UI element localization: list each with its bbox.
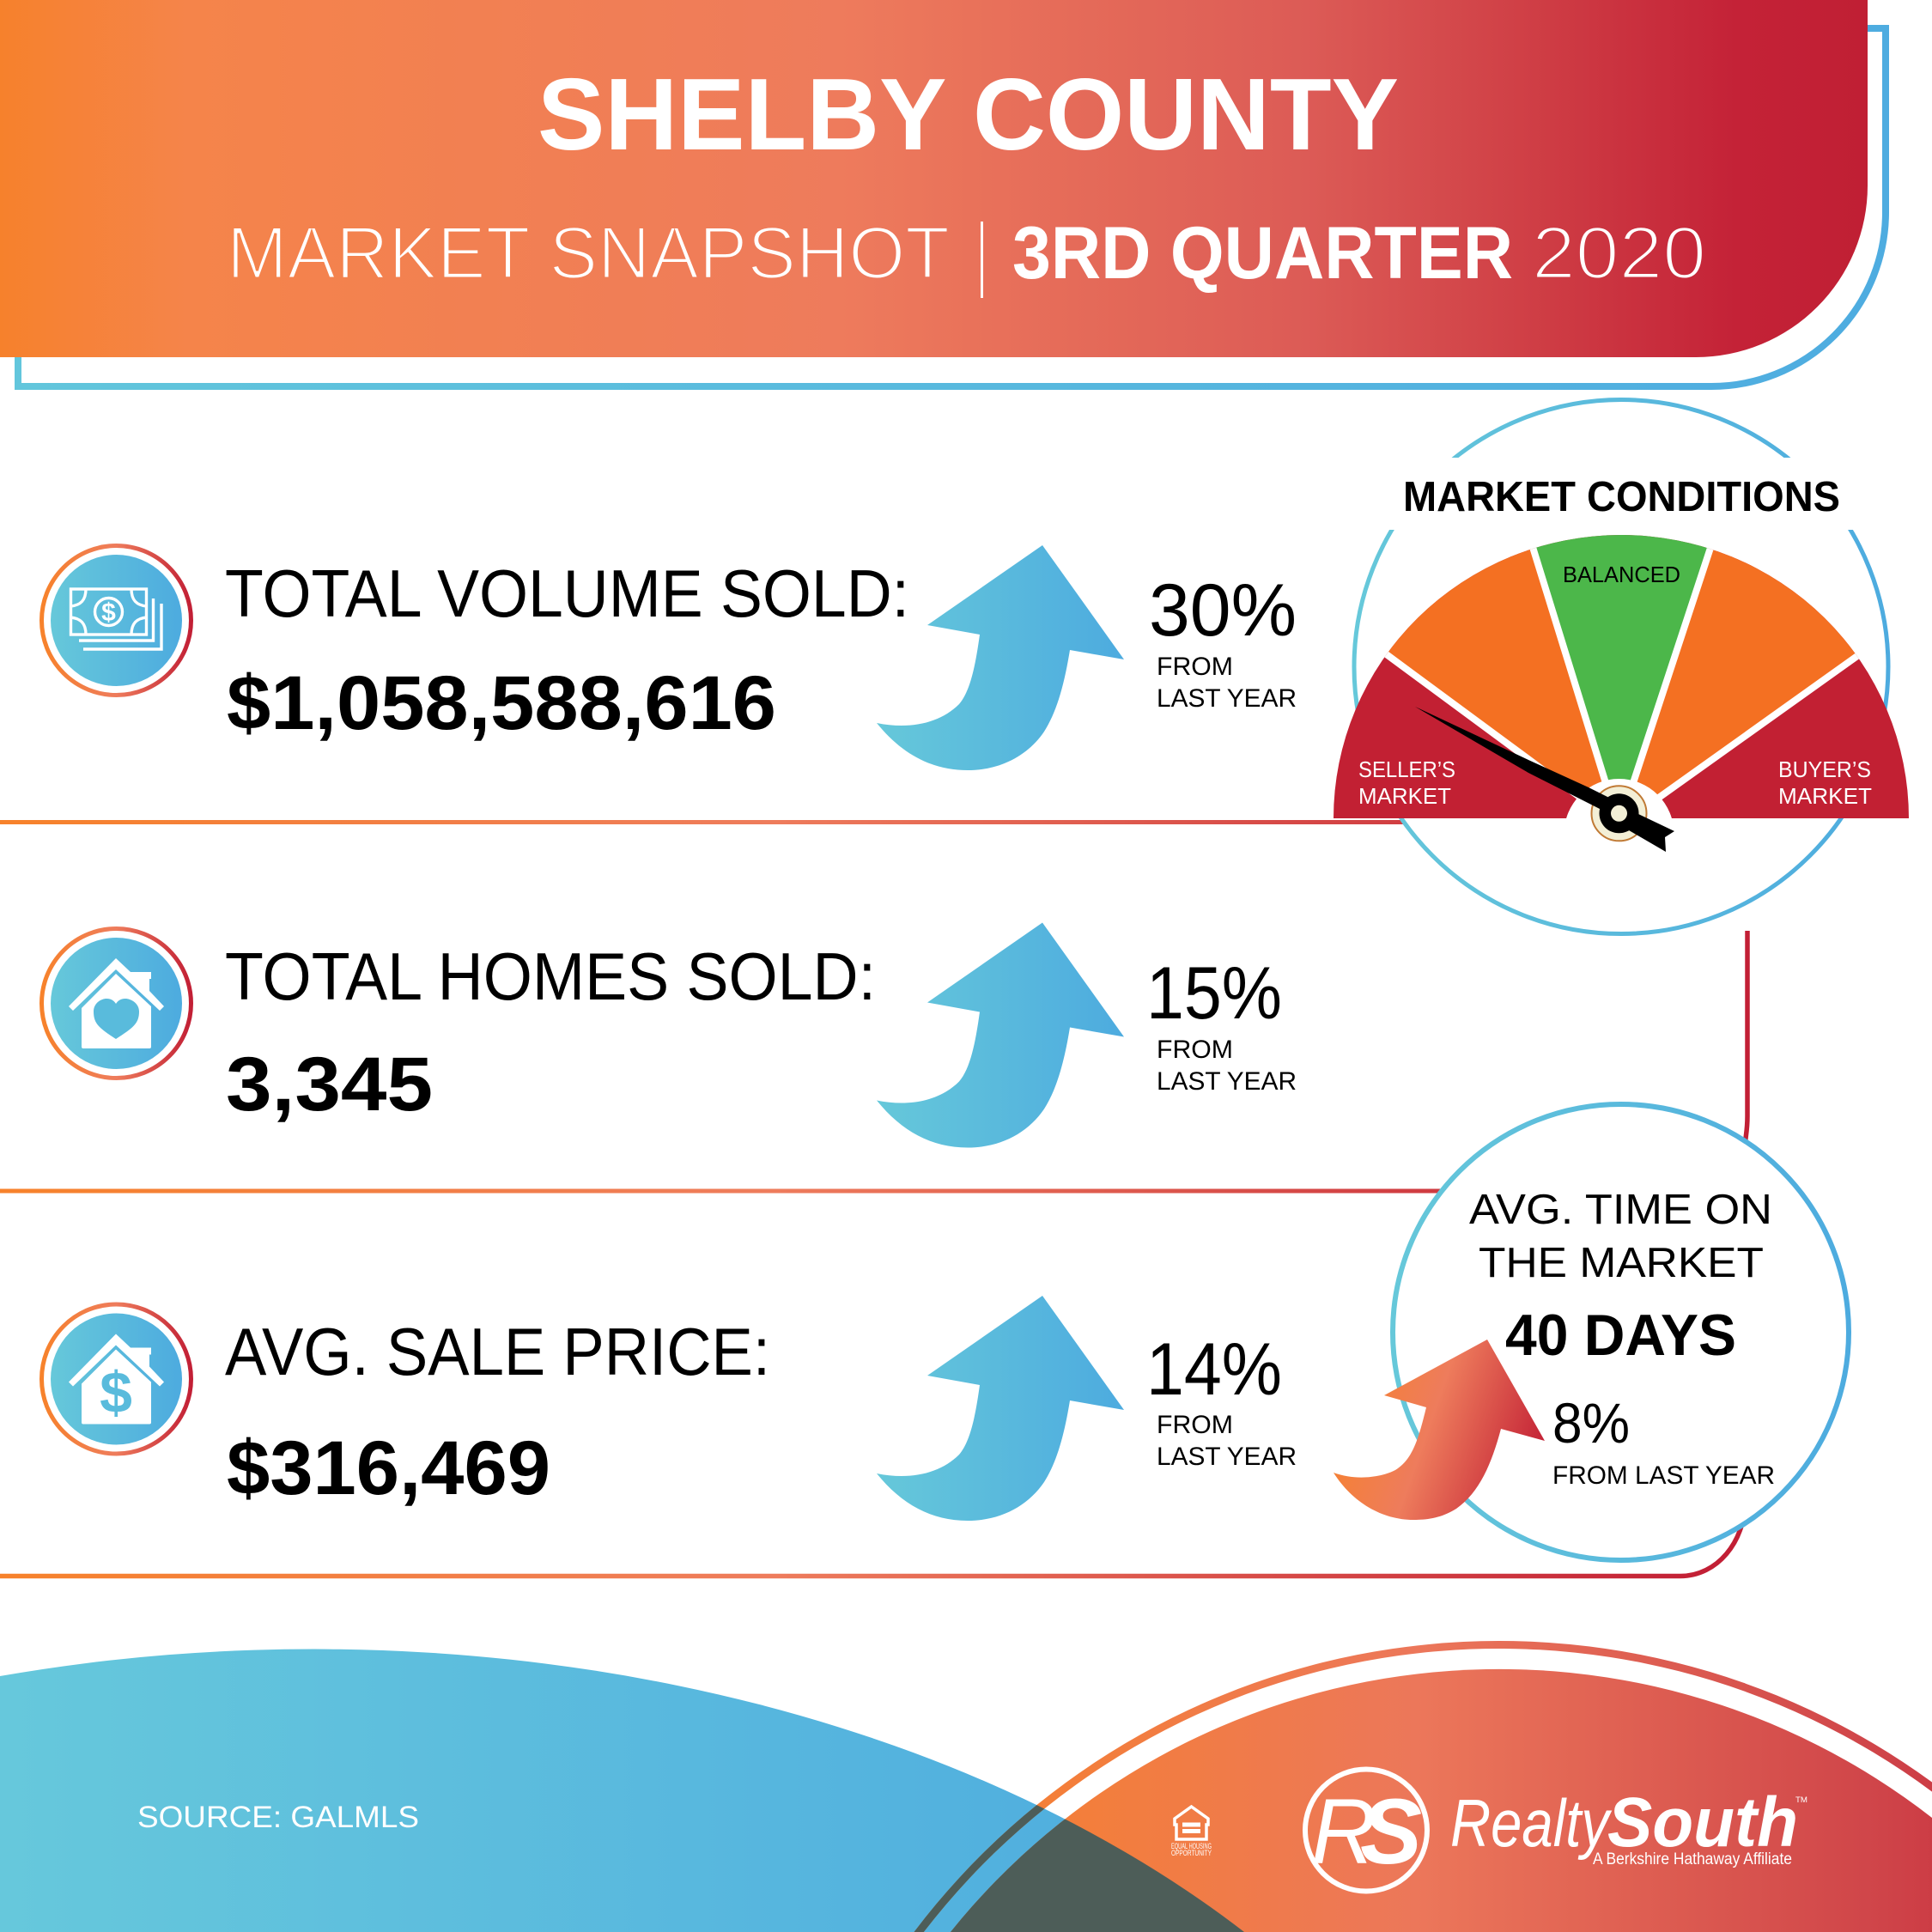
seller's market label: MARKET [1358,783,1451,809]
percent: 14% [1146,1328,1282,1411]
panel: market conditions gauge [1322,400,1923,934]
subtitle: quarter: 3RD QUARTER [1012,212,1513,295]
from last year: FROM [1157,1411,1233,1439]
arrow up [877,545,1124,770]
from last year: FROM [1157,1036,1233,1064]
percent: 8% [1552,1391,1630,1455]
logo: RealtySouth: South [1607,1783,1798,1862]
icon: house with dollar: $ [100,1360,132,1425]
arrow up [877,1296,1124,1521]
row 1: total volume sold: LAST YEAR [1157,684,1297,713]
arrow up [1334,1340,1545,1520]
logo: RealtySouth [1305,1769,1807,1891]
panel: average time on the market: THE MARKET [1479,1240,1764,1286]
gauge dial [1334,535,1909,818]
gauge ring [1354,400,1888,934]
icon: house with heart [41,929,191,1078]
icon: money: $ [101,598,116,627]
title: SHELBY COUNTY [538,58,1399,172]
label: TOTAL HOMES SOLD: [225,939,876,1014]
icon: equal housing [1171,1807,1212,1857]
from last year: FROM [1157,653,1233,681]
logo: RealtySouth: TM [1795,1795,1807,1804]
needle [1415,707,1674,852]
logo: RealtySouth: A Berkshire Hathaway Affiliate [1593,1850,1792,1868]
divider rule row 1 [0,820,1460,824]
row 2: total homes sold: LAST YEAR [1157,1067,1297,1096]
percent: 15% [1146,952,1282,1035]
dome outline [914,1641,1932,1932]
row 3: average sale price [41,1296,1297,1521]
icon: equal housing: OPPORTUNITY [1171,1849,1212,1857]
heading: MARKET CONDITIONS [1403,474,1840,520]
panel: average time on the market [1334,1104,1849,1560]
arrow up [877,922,1124,1147]
icon: money [41,546,191,696]
divider rule row 2 [0,1188,1460,1194]
circle [1393,1104,1849,1560]
row 3: average sale price: LAST YEAR [1157,1443,1297,1471]
buyer's market label [1778,756,1872,809]
divider rule with rounded right side [0,931,1747,1577]
row 1: total volume sold [41,545,1297,770]
heading: AVG. TIME ON [1469,1187,1772,1233]
orange dome [951,1669,1932,1932]
header banner [0,0,1868,357]
blue wave [0,1649,1244,1932]
label: AVG. SALE PRICE: [225,1314,770,1389]
buyer's market label: BUYER’S [1778,756,1871,782]
from last year: FROM LAST YEAR [1552,1461,1775,1490]
percent: 30% [1149,569,1297,652]
row 2: total homes sold [41,922,1297,1147]
value: $1,058,588,616 [227,659,776,745]
logo: RealtySouth: S [1360,1779,1422,1883]
source: SOURCE: GALMLS [137,1801,419,1834]
value: 40 DAYS [1505,1303,1736,1368]
logo: RealtySouth: Realty [1450,1785,1612,1861]
subtitle: year: 2020 [1532,212,1706,295]
footer [0,1641,1932,1932]
label: TOTAL VOLUME SOLD: [225,556,909,631]
logo: RealtySouth: R [1311,1779,1376,1883]
seller's market label [1358,756,1455,809]
icon: house with dollar [41,1304,191,1454]
overlap of dome and wave [914,1805,1244,1932]
buyer's market label: MARKET [1778,783,1872,809]
seller's market label: SELLER’S [1358,756,1455,782]
value: $316,469 [227,1425,550,1510]
header outline [18,28,1886,386]
subtitle divider [981,222,983,298]
value: 3,345 [226,1041,433,1127]
balanced label: BALANCED [1563,562,1680,587]
icon: equal housing: EQUAL HOUSING [1171,1842,1212,1850]
subtitle: market snapshot: MARKET SNAPSHOT [227,212,950,295]
